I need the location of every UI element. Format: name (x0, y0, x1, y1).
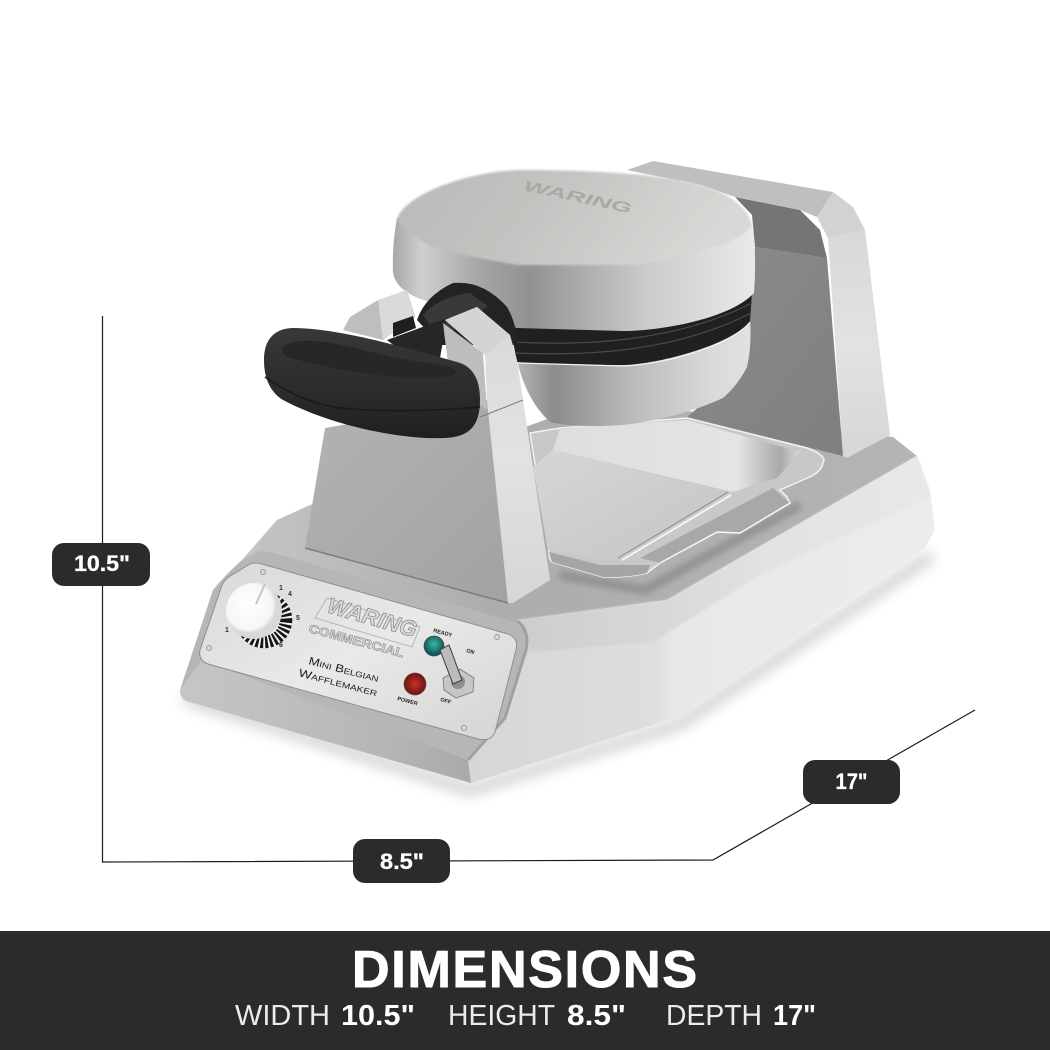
dial pointer (256, 584, 265, 604)
footer band (0, 931, 1050, 1050)
footer measurements (235, 1000, 816, 1032)
model name line two: Wafflemaker (297, 667, 379, 699)
gasket lower highlight (517, 322, 750, 366)
Waring logo (307, 593, 420, 660)
rear bracket (343, 290, 415, 340)
base: front frame (180, 551, 526, 760)
handle arm (387, 318, 447, 358)
plate screws (206, 570, 500, 730)
toggle switch (440, 645, 474, 698)
power light (404, 673, 426, 695)
ground shadow (184, 555, 932, 790)
tray inner floor (533, 450, 733, 560)
tray front lip (549, 552, 650, 577)
dial knurled skirt (236, 592, 292, 648)
footer measurements: 8.5" (567, 1000, 626, 1032)
dimension lines (102, 316, 975, 862)
logo frame (315, 598, 420, 647)
brushed metal plate (200, 563, 517, 740)
post seam (480, 400, 523, 417)
badge: width 10.5: 10.5" (74, 551, 130, 576)
Waring logo: COMMERCIAL (307, 621, 406, 660)
footer measurements: WIDTH (235, 1000, 330, 1032)
ready light (424, 636, 444, 656)
footer measurements: HEIGHT (448, 1000, 555, 1032)
badge: depth 17 (803, 760, 900, 804)
post column chamfer (445, 307, 510, 355)
dial scale: 4 (288, 591, 292, 598)
handle inner hollow (282, 341, 457, 378)
switch labels: ON (465, 648, 475, 656)
back post light side face (828, 230, 890, 458)
post base shadow line (305, 548, 508, 603)
black handle (264, 328, 480, 438)
front post (264, 283, 550, 603)
base: right side upper facet (517, 456, 930, 652)
lid top surface (397, 170, 752, 265)
dial scale: 1 (279, 585, 283, 592)
back post top face (627, 161, 833, 217)
black gasket band (510, 293, 752, 365)
tray back wall (553, 420, 800, 492)
tray inner groove (622, 495, 731, 560)
base: frame right ring (468, 621, 527, 760)
badge: height 8.5: 8.5" (380, 849, 424, 874)
lower bowl (517, 320, 751, 426)
switch labels (396, 628, 475, 707)
back post lower dark face (687, 247, 843, 456)
back post chamfer (817, 192, 865, 238)
gasket grooves (514, 303, 752, 343)
tray outer edge highlight (660, 503, 790, 563)
tray outer rim (530, 418, 824, 577)
switch labels: POWER (396, 696, 418, 707)
waffle plate housing (393, 170, 755, 426)
tray shadow on base (560, 505, 800, 590)
waffle maker product illustration (180, 161, 935, 790)
Waring logo: WARING (325, 593, 420, 642)
handle seam (265, 377, 480, 411)
tray handle tab (640, 488, 790, 563)
tray (530, 418, 824, 577)
badge: height 8.5 (353, 839, 450, 883)
model name: Mini Belgian (307, 655, 380, 685)
lid logo: WARING (522, 178, 633, 217)
footer measurements: DEPTH (666, 1000, 762, 1032)
back post (627, 161, 890, 458)
base: top surface (214, 400, 917, 700)
temperature dial (225, 583, 300, 649)
base: front lower band (180, 660, 471, 783)
badge: width 10.5 (52, 543, 150, 586)
switch labels: OFF (439, 697, 452, 706)
post light column (445, 307, 550, 603)
switch labels: READY (432, 628, 453, 639)
lid side wall (393, 218, 755, 331)
black collar (417, 283, 518, 345)
dial scale: 5 (296, 615, 300, 622)
hinge slot (393, 316, 416, 337)
dial scale: 1 (225, 627, 229, 634)
back post upper dark face (735, 197, 827, 258)
post inner panel (443, 323, 487, 410)
post dark front face (305, 400, 508, 603)
footer measurements: 10.5" (341, 1000, 415, 1032)
base: right side face (468, 456, 935, 783)
control plate (200, 563, 517, 740)
badge: depth 17: 17" (836, 769, 868, 794)
footer measurements: 17" (773, 1000, 816, 1032)
dial white top (226, 583, 282, 639)
dial scale: 6 (279, 642, 283, 649)
footer heading: DIMENSIONS (352, 941, 697, 999)
